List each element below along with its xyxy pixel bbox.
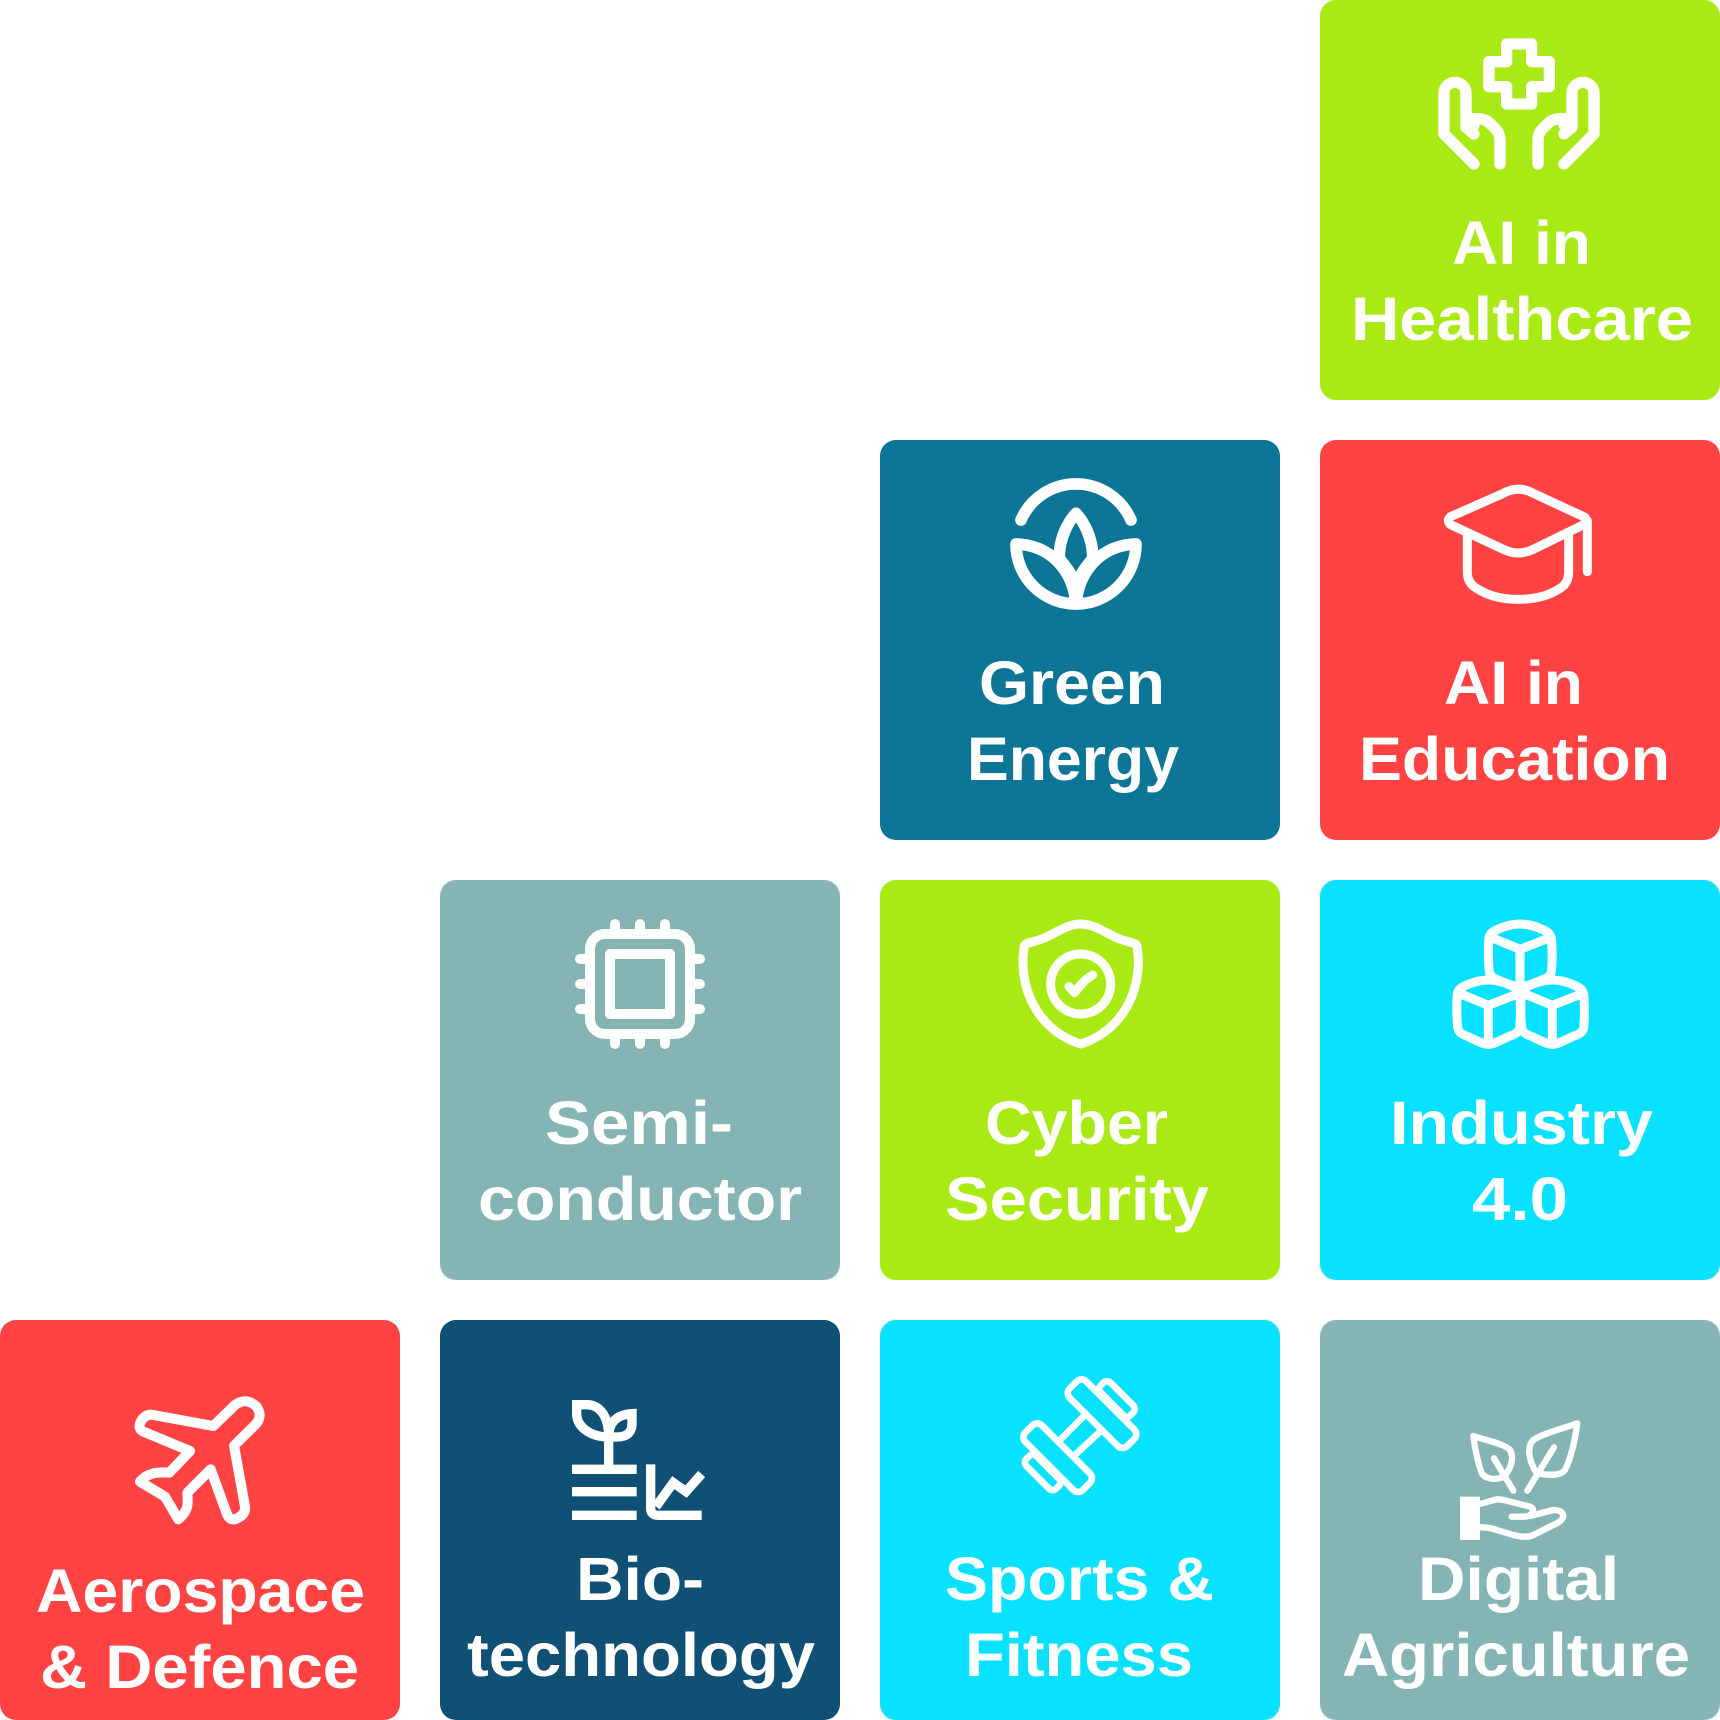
panel: Semiconductor (440, 880, 840, 1280)
label: Green Energy: Green (979, 649, 1165, 717)
label: Digital Agriculture: Agriculture (1342, 1621, 1690, 1689)
label: Green Energy (967, 649, 1179, 793)
label: AI in Education: AI in (1444, 649, 1583, 717)
label: AI in Healthcare: AI in (1452, 209, 1591, 277)
label: Digital Agriculture: Digital (1418, 1545, 1619, 1613)
panel: AI in Healthcare (1320, 0, 1720, 400)
icon: stacked cubes (1457, 924, 1584, 1044)
panel: AI in Education (1320, 440, 1720, 840)
label: Biotechnology (467, 1545, 815, 1689)
panel: Aerospace & Defence (0, 1320, 400, 1720)
panel: Digital Agriculture (1320, 1320, 1720, 1720)
label: Sports & Fitness: Fitness (965, 1621, 1193, 1689)
label: Biotechnology: technology (467, 1621, 815, 1689)
icon: dumbbell (1021, 1377, 1139, 1495)
label: AI in Education: Education (1359, 725, 1670, 793)
label: Semiconductor: conductor (478, 1165, 802, 1233)
label: Cyber Security (945, 1089, 1209, 1233)
label: Aerospace & Defence: & Defence (40, 1633, 359, 1701)
panel: Green Energy (880, 440, 1280, 840)
icon: microchip (580, 924, 700, 1044)
label: Green Energy: Energy (967, 725, 1179, 793)
icon: sprout on soil with growth chart (572, 1405, 702, 1515)
panel: Cyber Security (880, 880, 1280, 1280)
label: Semiconductor (478, 1089, 802, 1233)
label: Semiconductor: Semi- (545, 1089, 733, 1157)
icon: hand with two leaves (1460, 1423, 1577, 1540)
label: Industry 4.0 (1390, 1089, 1653, 1233)
label: Cyber Security: Cyber (985, 1089, 1168, 1157)
label: Aerospace & Defence: Aerospace (36, 1557, 365, 1625)
label: Digital Agriculture (1342, 1545, 1690, 1689)
label: Cyber Security: Security (945, 1165, 1209, 1233)
icon: hands holding medical cross (1444, 44, 1594, 164)
panel: Biotechnology (440, 1320, 840, 1720)
icon: graduation cap (1448, 489, 1587, 599)
icon: airplane (140, 1401, 260, 1519)
label: AI in Healthcare (1351, 209, 1693, 353)
icon: lotus under arc (1016, 484, 1136, 604)
panel: Sports & Fitness (880, 1320, 1280, 1720)
label: Aerospace & Defence (36, 1557, 365, 1701)
label: AI in Education (1359, 649, 1670, 793)
label: Biotechnology: Bio- (576, 1545, 704, 1613)
label: Industry 4.0: 4.0 (1472, 1165, 1568, 1233)
icon: shield with check (1023, 924, 1138, 1044)
label: AI in Healthcare: Healthcare (1351, 285, 1693, 353)
label: Sports & Fitness: Sports & (945, 1545, 1214, 1613)
label: Industry 4.0: Industry (1390, 1089, 1653, 1157)
label: Sports & Fitness (945, 1545, 1214, 1689)
panel: Industry 4.0 (1320, 880, 1720, 1280)
